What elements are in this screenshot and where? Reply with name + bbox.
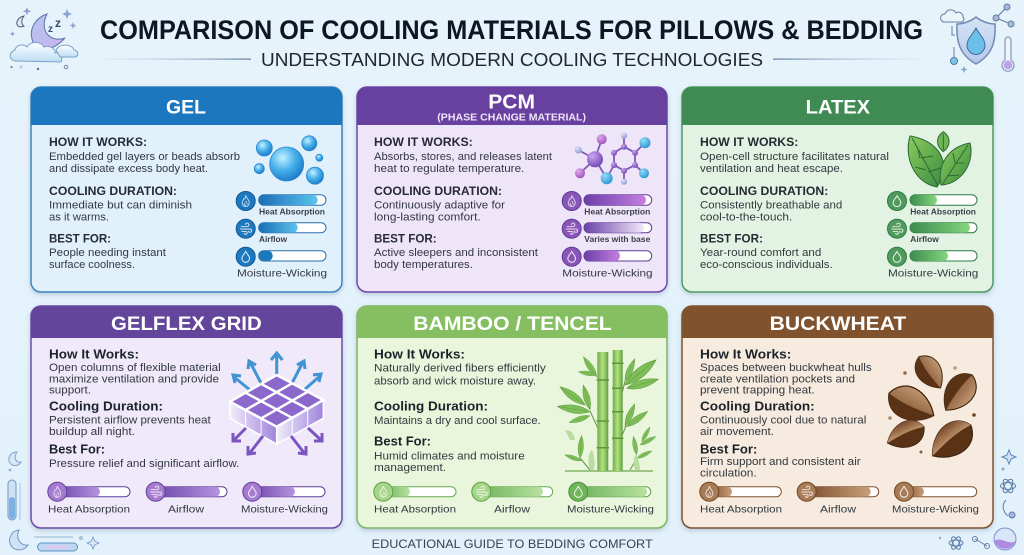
rating: heat absorption: Heat Absorption [48,504,130,515]
decoration: bottom-right atoms and sphere [939,450,1016,551]
buckwheat text block: Firm support and consistent air [700,456,861,468]
rating: airflow [146,482,227,515]
rating: moisture-wicking: Moisture-Wicking [567,504,654,515]
latex text block: BEST FOR: [700,234,763,246]
rating: airflow: Airflow [259,235,288,244]
pcm text block [374,137,552,271]
rating: heat absorption [374,482,456,515]
pcm text block: heat to regulate temperature. [374,163,524,175]
rating: airflow: Airflow [494,504,531,515]
latex heading: LATEX [806,97,870,118]
gel text block: COOLING DURATION: [49,186,177,198]
gel text block: BEST FOR: [49,234,111,246]
rating: airflow: Airflow [168,504,205,515]
latex text block: Year-round comfort and [700,247,821,259]
rating: airflow [236,219,326,244]
buckwheat text block [700,346,872,480]
panel: buckwheat [682,306,993,528]
arrows downward [233,428,322,454]
bamboo header [357,306,667,338]
gelflex heading: GELFLEX GRID [111,314,262,335]
rating: heat absorption [236,192,326,217]
buckwheat text block: prevent trapping heat. [700,385,815,397]
rating: moisture-wicking [241,482,328,515]
rating: heat absorption: Heat Absorption [584,208,650,217]
buckwheat heading: BUCKWHEAT [770,314,907,335]
pcm text block: long-lasting comfort. [374,212,481,224]
gel text block: and dissipate excess body heat. [49,163,208,175]
gelflex text block: Cooling Duration: [49,399,163,414]
rating: moisture-wicking: Moisture-Wicking [562,269,653,280]
bamboo text block: Humid climates and moisture [374,451,525,463]
pcm text block: body temperatures. [374,259,473,271]
gelflex text block: How It Works: [49,346,139,361]
gel text block: as it warms. [49,212,109,224]
rating: heat absorption: Heat Absorption [700,504,782,515]
arrows upward [233,353,321,390]
buckwheat text block: Spaces between buckwheat hulls [700,362,872,374]
subtitle with rules: UNDERSTANDING MODERN COOLING TECHNOLOGIES [261,50,763,70]
rating: varies with base: Varies with base [584,235,651,244]
buckwheat text block: create ventilation pockets and [700,373,855,385]
rating: airflow [888,219,977,244]
rating: moisture-wicking: Moisture-Wicking [888,269,978,280]
rating: moisture-wicking [236,247,327,280]
panel: latex [682,87,993,292]
gelflex text block: Best For: [49,441,105,456]
pcm text block: COOLING DURATION: [374,186,502,198]
panel: bamboo / tencel [357,306,667,528]
gelflex text block: maximize ventilation and provide [49,373,219,385]
icon: moon and cloud [10,7,78,70]
bamboo heading: BAMBOO / TENCEL [413,314,612,335]
gel text block: HOW IT WORKS: [49,137,147,149]
panel: pcm [357,87,667,292]
rating: airflow [472,482,553,515]
rating: moisture-wicking [562,247,653,280]
rating: moisture-wicking [567,482,654,515]
pcm text block: HOW IT WORKS: [374,137,473,149]
rating: airflow [797,482,879,515]
icon: moon and cloud: z [55,16,61,30]
pcm text block: Continuously adaptive for [374,200,506,212]
gelflex text block: Pressure relief and significant airflow. [49,458,239,470]
icon: leaves [908,132,971,187]
buckwheat header [682,306,993,338]
gel heading: GEL [166,97,206,118]
rating: airflow: Airflow [820,504,857,515]
buckwheat card background [682,306,993,528]
bamboo text block: Best For: [374,434,431,449]
rating: heat absorption [48,482,130,515]
icon: bamboo [557,350,660,471]
gel text block: Immediate but can diminish [49,200,192,212]
latex text block: COOLING DURATION: [700,186,828,198]
buckwheat text block: Continuously cool due to natural [700,415,866,427]
buckwheat text block: Cooling Duration: [700,399,815,414]
panel: gel [31,87,342,292]
rating: heat absorption [700,482,782,515]
gel header [31,87,342,125]
gelflex text block [49,346,239,470]
rating: moisture-wicking [892,482,979,515]
gelflex card background [31,306,342,528]
latex text block: Open-cell structure facilitates natural [700,151,889,163]
latex text block: ventilation and heat escape. [700,163,843,175]
rating: moisture-wicking: Moisture-Wicking [241,504,328,515]
icon: molecule [575,133,650,185]
latex text block [700,137,889,271]
buckwheat text block: How It Works: [700,346,791,361]
gelflex text block: Open columns of flexible material [49,362,221,374]
rating: heat absorption: Heat Absorption [910,208,976,217]
decoration: bottom-left moons and gauge [8,452,99,551]
bamboo text block: Maintains a dry and cool surface. [374,415,541,427]
rating: heat absorption: Heat Absorption [374,504,456,515]
pcm card background [357,87,667,292]
rating: heat absorption [562,192,652,217]
bamboo text block: Naturally derived fibers efficiently [374,363,546,375]
footer: EDUCATIONAL GUIDE TO BEDDING COMFORT [372,537,653,551]
gelflex text block: support. [49,385,91,397]
gelflex text block: Persistent airflow prevents heat [49,415,211,427]
title: COMPARISON OF COOLING MATERIALS FOR PILLOWS & BEDDING [100,15,923,45]
panel: gelflex grid [31,306,342,528]
gel text block [49,137,240,271]
latex header [682,87,993,125]
bamboo text block: How It Works: [374,346,465,361]
icon: buckwheat hulls [882,350,984,468]
rating: airflow: Airflow [910,235,940,244]
gelflex text block: buildup all night. [49,426,135,438]
rating: varies with base [562,219,652,244]
latex text block: HOW IT WORKS: [700,137,798,149]
latex card background [682,87,993,292]
icon: shield, drop, thermometer [941,4,1014,73]
buckwheat text block: air movement. [700,426,774,438]
buckwheat text block: Best For: [700,441,757,456]
icon: moon and cloud: z [48,24,53,35]
pcm text block: Active sleepers and inconsistent [374,247,538,259]
rating: moisture-wicking: Moisture-Wicking [237,269,327,280]
pcm text block: Absorbs, stores, and releases latent [374,151,552,163]
gelflex header [31,306,342,338]
gel text block: Embedded gel layers or beads absorb [49,151,240,163]
rating: heat absorption [888,192,977,217]
gel card background [31,87,342,292]
bamboo text block: Cooling Duration: [374,399,488,414]
latex text block: Consistently breathable and [700,200,842,212]
rating: moisture-wicking: Moisture-Wicking [892,504,979,515]
bamboo card background [357,306,667,528]
bamboo text block: absorb and wick moisture away. [374,375,536,387]
pcm heading: PCM [488,91,535,113]
icon: ventilated grid with arrows [230,353,323,454]
gel text block: People needing instant [49,247,166,259]
icon: gel bubbles [254,136,324,184]
rating: heat absorption: Heat Absorption [259,208,325,217]
pcm text block: BEST FOR: [374,234,437,246]
pcm heading: (PHASE CHANGE MATERIAL) [437,113,586,124]
pcm header [357,87,667,125]
buckwheat text block: circulation. [700,468,757,480]
gel text block: surface coolness. [49,259,135,271]
pcm heading [437,91,586,124]
rating: moisture-wicking [888,247,978,280]
bamboo text block [374,346,546,474]
latex text block: cool-to-the-touch. [700,212,792,224]
latex text block: eco-conscious individuals. [700,259,833,271]
bamboo text block: management. [374,462,446,474]
